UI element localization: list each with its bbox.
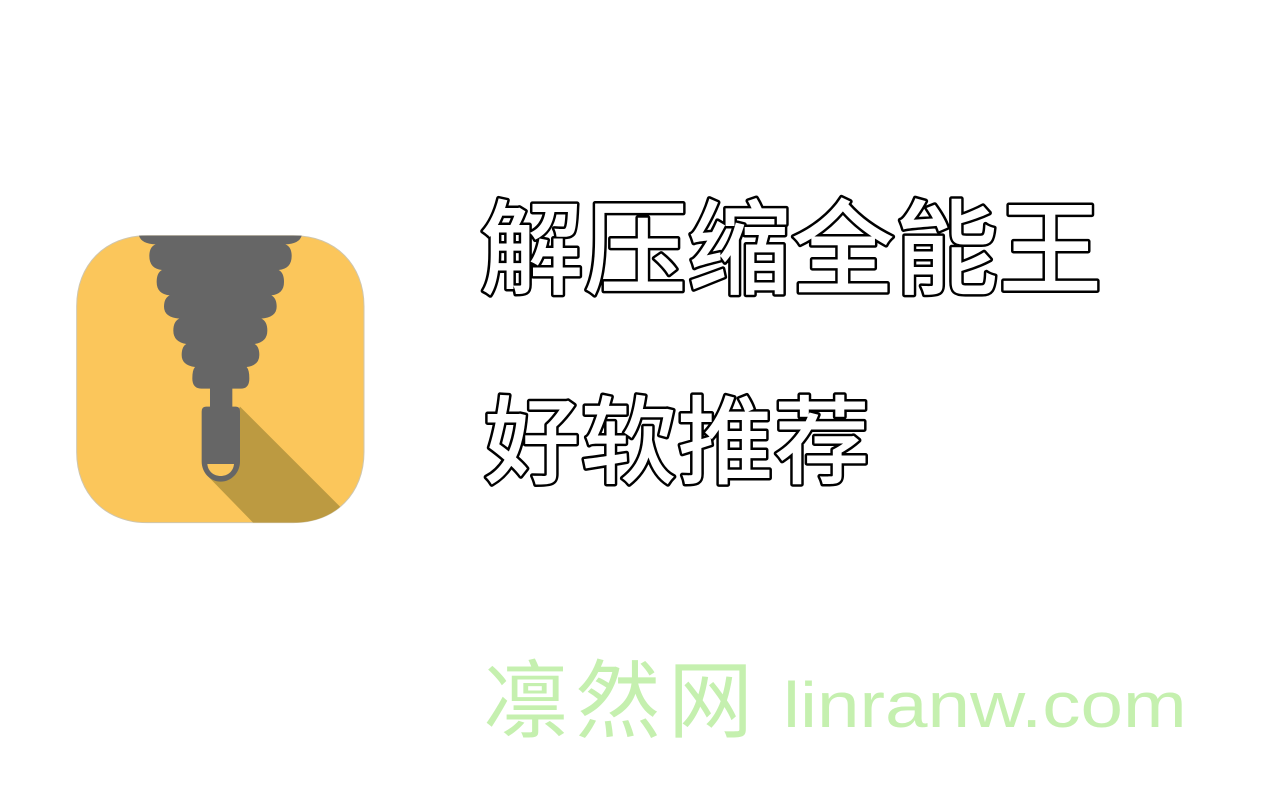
watermark: site name: 凛然网 [483,655,753,750]
zipper long shadow [206,406,340,522]
subtitle: 好软推荐 [484,390,870,497]
watermark: url: linranw.com [783,669,1187,741]
zipper pull hole [207,464,234,476]
icon background [77,236,364,523]
title: 解压缩全能王 [480,192,1102,308]
icon: zipper app icon [77,236,364,540]
zipper teeth and pull [139,236,302,482]
